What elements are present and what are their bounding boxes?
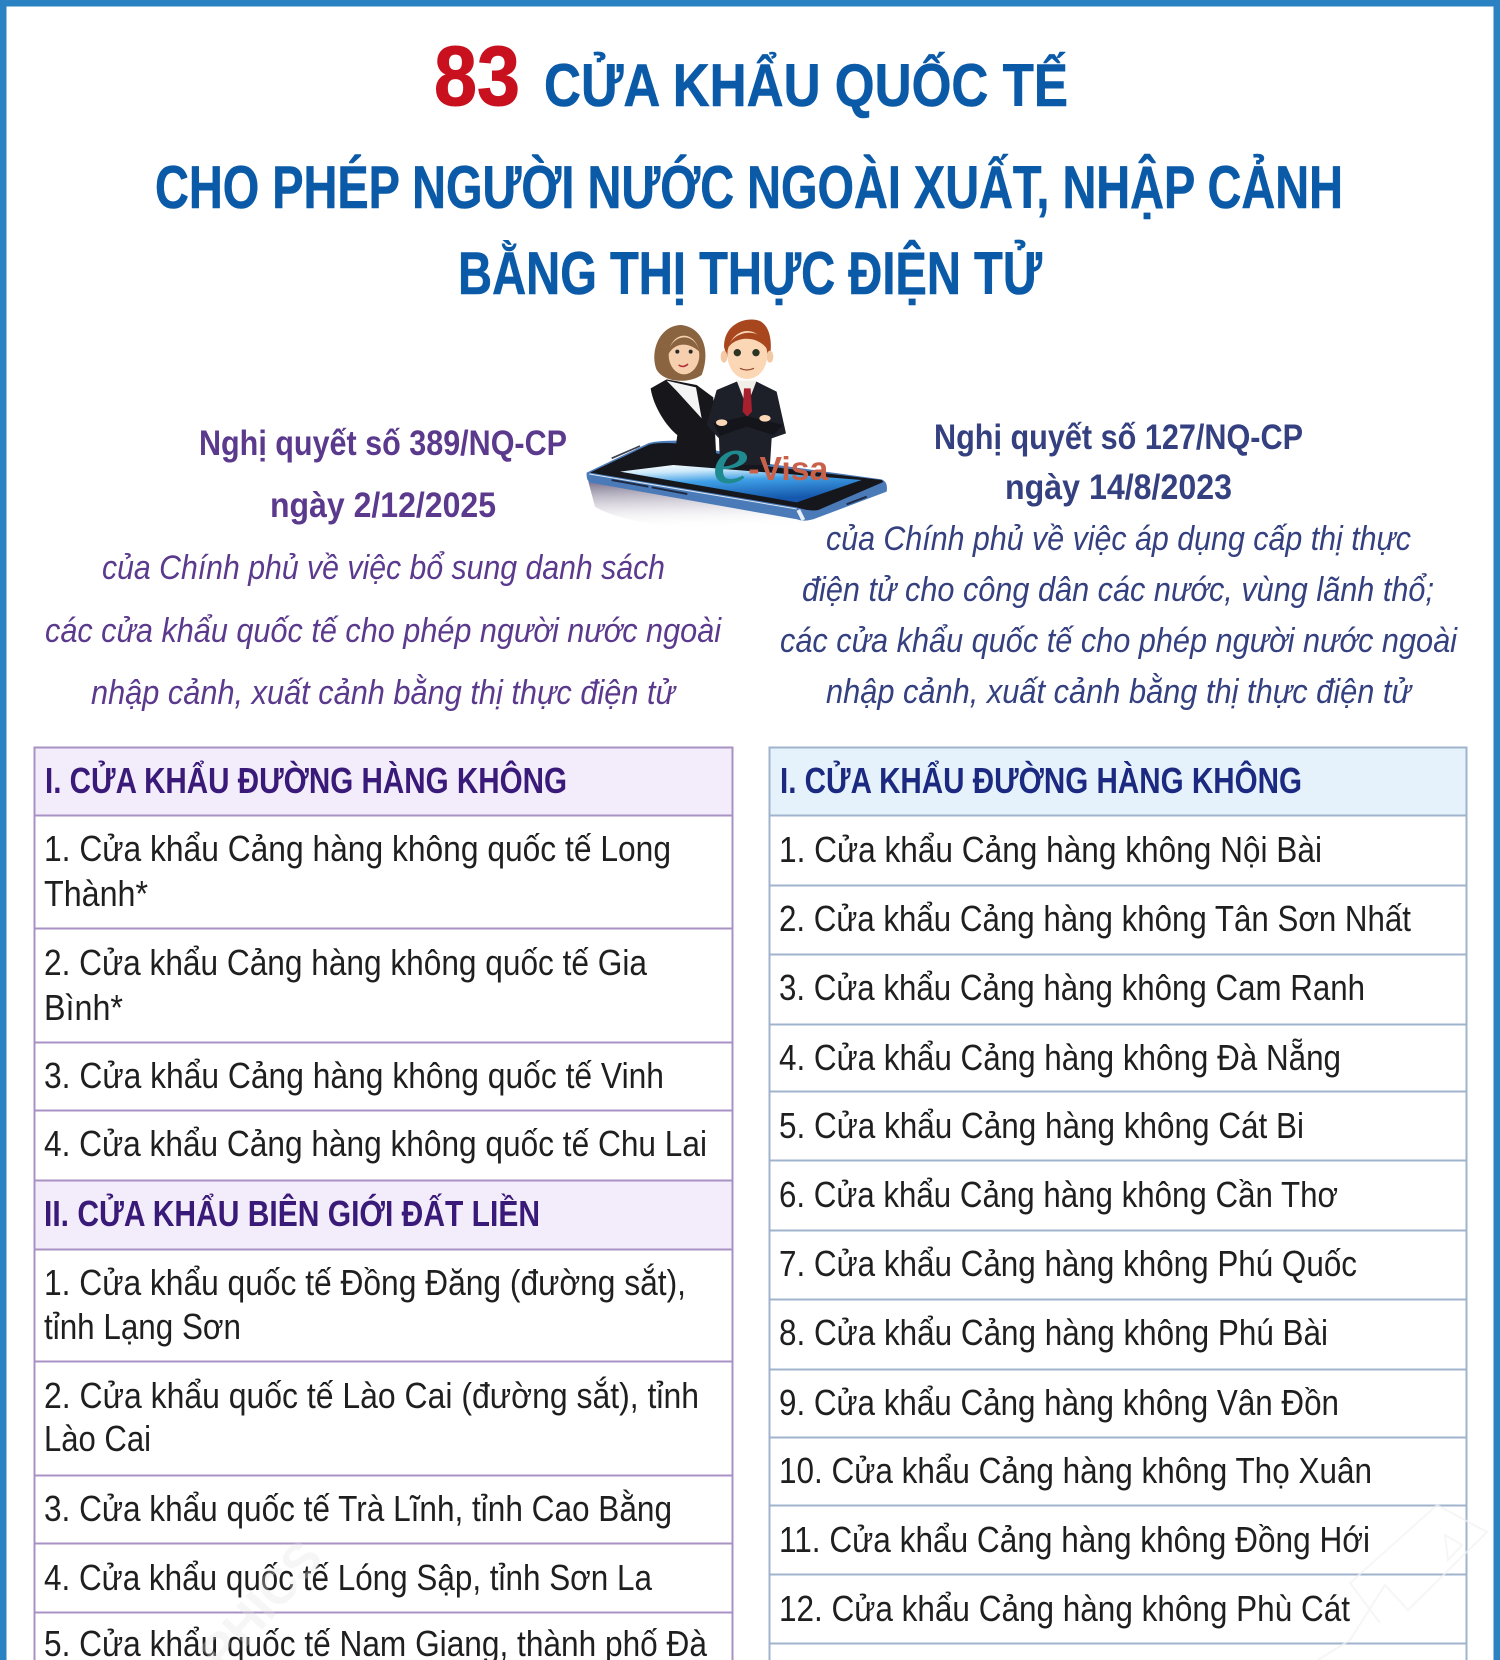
title line 3: BẰNG THỊ THỰC ĐIỆN TỬ <box>458 240 1042 307</box>
right resolution text: ngày 14/8/2023 <box>1005 468 1232 507</box>
right air rows: 9. Cửa khẩu Cảng hàng không Vân Đồn <box>779 1382 1339 1423</box>
right air rows: 3. Cửa khẩu Cảng hàng không Cam Ranh <box>779 967 1365 1008</box>
e-visa label: e <box>713 425 748 498</box>
left resolution text: ngày 2/12/2025 <box>270 486 496 525</box>
left resolution text: các cửa khẩu quốc tế cho phép người nước ngoài <box>45 612 722 650</box>
right air rows <box>779 829 1411 1660</box>
right resolution text: nhập cảnh, xuất cảnh bằng thị thực điện tử <box>826 673 1413 711</box>
right resolution text <box>780 418 1458 711</box>
right air rows: 8. Cửa khẩu Cảng hàng không Phú Bài <box>779 1312 1328 1353</box>
left air rows: Thành* <box>44 873 148 914</box>
left land rows: 2. Cửa khẩu quốc tế Lào Cai (đường sắt), tỉnh <box>44 1375 699 1416</box>
right air rows: 10. Cửa khẩu Cảng hàng không Thọ Xuân <box>779 1450 1372 1491</box>
right air rows: 2. Cửa khẩu Cảng hàng không Tân Sơn Nhất <box>779 898 1411 939</box>
right resolution text: của Chính phủ về việc áp dụng cấp thị thực <box>826 520 1411 558</box>
right resolution text: điện tử cho công dân các nước, vùng lãnh thổ; <box>802 571 1434 609</box>
e-visa label: -Visa <box>748 451 829 488</box>
left air rows: 2. Cửa khẩu Cảng hàng không quốc tế Gia <box>44 942 648 983</box>
left land rows: 1. Cửa khẩu quốc tế Đồng Đăng (đường sắt), <box>44 1262 686 1303</box>
left air rows: 4. Cửa khẩu Cảng hàng không quốc tế Chu Lai <box>44 1123 707 1164</box>
left resolution text: nhập cảnh, xuất cảnh bằng thị thực điện tử <box>91 674 677 712</box>
left land rows: 4. Cửa khẩu quốc tế Lóng Sập, tỉnh Sơn La <box>44 1557 653 1598</box>
title number 83: 83 <box>434 29 520 123</box>
watermark <box>189 1505 1487 1660</box>
man <box>707 319 786 465</box>
left air rows: Bình* <box>44 987 123 1028</box>
left land rows: tỉnh Lạng Sơn <box>44 1306 241 1347</box>
right air rows: 4. Cửa khẩu Cảng hàng không Đà Nẵng <box>779 1037 1341 1078</box>
left land rows: Lào Cai <box>44 1418 151 1459</box>
left land rows <box>44 1262 708 1660</box>
title <box>155 29 1343 307</box>
e-visa label <box>713 425 829 498</box>
right resolution text: Nghị quyết số 127/NQ-CP <box>934 418 1303 457</box>
right air rows: 1. Cửa khẩu Cảng hàng không Nội Bài <box>779 829 1322 870</box>
left land rows: 3. Cửa khẩu quốc tế Trà Lĩnh, tỉnh Cao Bằng <box>44 1488 672 1529</box>
left resolution text <box>45 424 722 712</box>
left resolution text: Nghị quyết số 389/NQ-CP <box>199 424 567 463</box>
right air rows: 5. Cửa khẩu Cảng hàng không Cát Bi <box>779 1105 1304 1146</box>
right air rows: 6. Cửa khẩu Cảng hàng không Cần Thơ <box>779 1174 1338 1215</box>
right air rows: 12. Cửa khẩu Cảng hàng không Phù Cát <box>779 1588 1350 1629</box>
left heading: land border: II. CỬA KHẨU BIÊN GIỚI ĐẤT LIỀN <box>44 1192 540 1234</box>
left resolution text: của Chính phủ về việc bổ sung danh sách <box>102 549 665 587</box>
left air rows: 1. Cửa khẩu Cảng hàng không quốc tế Long <box>44 828 671 869</box>
title line 1: CỬA KHẨU QUỐC TẾ <box>544 52 1068 119</box>
left air rows: 3. Cửa khẩu Cảng hàng không quốc tế Vinh <box>44 1055 664 1096</box>
right heading: air: I. CỬA KHẨU ĐƯỜNG HÀNG KHÔNG <box>780 759 1302 801</box>
illustration: people on phone e-visa <box>587 319 887 531</box>
left air rows <box>44 828 707 1164</box>
panel: left table <box>34 748 733 1660</box>
right air rows: 11. Cửa khẩu Cảng hàng không Đồng Hới <box>779 1519 1370 1560</box>
woman <box>651 325 717 465</box>
left heading: air: I. CỬA KHẨU ĐƯỜNG HÀNG KHÔNG <box>45 759 567 801</box>
right air rows: 7. Cửa khẩu Cảng hàng không Phú Quốc <box>779 1243 1357 1284</box>
panel: right table <box>769 748 1467 1660</box>
